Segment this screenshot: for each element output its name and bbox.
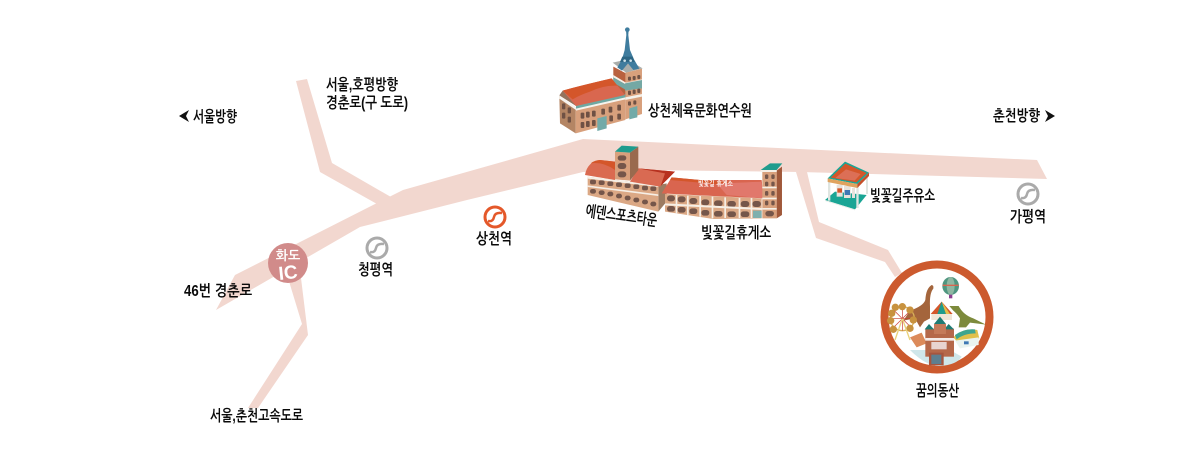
label: Chuncheon direction: 춘천방향 [993,107,1040,125]
label: gas station: 빛꽃길주유소 [870,187,935,205]
label: Cheongpyeong station: 청평역 [358,261,393,279]
carousel [931,302,953,320]
food stall [910,333,927,347]
window rows [590,180,656,206]
icon: IC marker [268,243,308,285]
roof left [585,160,615,180]
building: sports town [585,146,675,212]
water [910,350,962,366]
label: theme park: 꿈의동산 [916,382,959,400]
road: main highway [216,139,1047,310]
right tower [777,167,782,218]
road: upper branch [296,79,391,204]
label: expressway: 서울,춘천고속도로 [210,407,303,425]
road: right branch [796,172,902,277]
pumps [837,185,843,197]
arrow: to Seoul [179,110,189,122]
label: sports town: 에덴스포츠타운 [584,202,659,230]
label: route 46: 46번 경춘로 [184,282,252,300]
roof right [630,168,675,187]
forecourt [825,192,867,209]
pillars [828,181,830,201]
doors [597,116,607,131]
building: sports training centre [559,27,643,133]
IC label [276,248,300,285]
park illustration [887,277,986,366]
theme park badge [884,264,990,370]
grid [665,195,762,218]
shop window [753,211,762,218]
icon: Sangcheon station [485,207,505,227]
tower front face [625,69,642,119]
roof [563,78,625,106]
ferris wheel [887,303,917,340]
icon: Cheongpyeong station [367,238,387,258]
clock tower [630,147,638,181]
front face [576,96,625,133]
icon: Gapyeong station [1018,184,1038,204]
canopy roof [831,164,867,182]
label: Sangcheon station: 상천역 [476,230,512,248]
road: lower branch [248,278,308,408]
roof [662,177,763,198]
icon: gas station [825,162,869,210]
striped tent [953,329,979,348]
t-rex [949,306,986,327]
balloon [942,277,959,298]
label: old road line one: 서울,호평방향 [326,76,398,94]
arched windows [667,195,761,217]
side face [559,96,576,133]
roads [216,79,1047,408]
building: rest area [662,163,782,219]
windows [562,75,640,128]
canopy edge [828,162,869,184]
label: rest area: 빛꽃길휴게소 [701,224,771,242]
side wall [658,183,667,212]
ring [884,264,990,370]
brontosaurus [903,285,933,327]
tower left face [613,67,626,98]
label: Seoul direction: 서울방향 [193,108,237,126]
arrow: to Chuncheon [1045,110,1055,122]
label: old road line two: 경춘로(구 도로) [326,95,408,112]
IC label: IC [278,262,299,285]
front wall [588,177,658,212]
label: Gapyeong station: 가평역 [1010,208,1046,226]
IC label: 화도 [276,248,300,263]
wall [665,194,762,219]
eiffel spire [617,27,639,71]
rest area sign: 빛꽃길 휴게소 [698,179,733,188]
labels [184,76,1046,425]
tower top [613,59,643,73]
castle [925,317,954,365]
gable [559,88,576,106]
label: training centre: 상천체육문화연수원 [648,102,752,120]
